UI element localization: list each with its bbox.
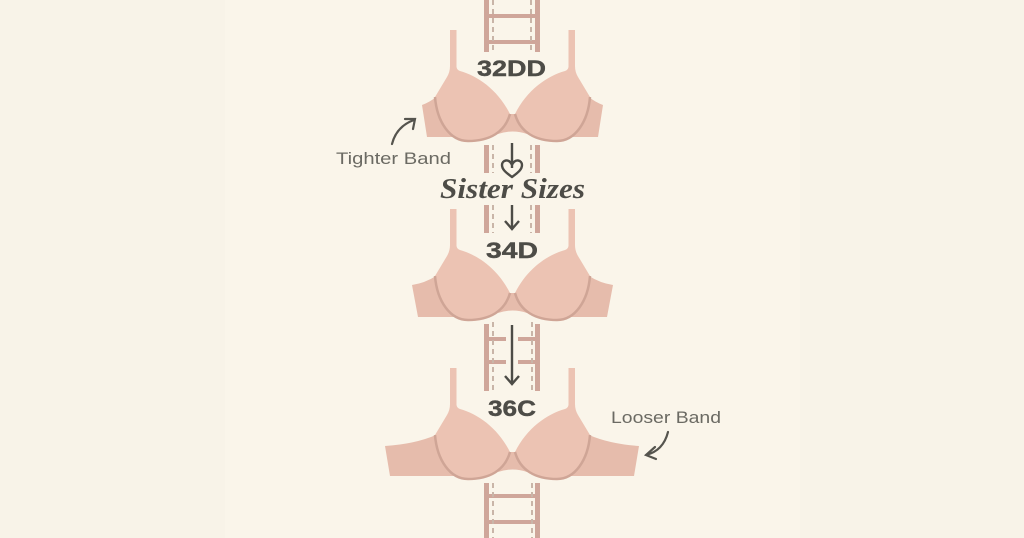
arrow: tighter band pointer bbox=[392, 119, 415, 144]
arrow down to 36C bbox=[505, 325, 519, 384]
label: Looser Band: Looser Band bbox=[611, 409, 721, 427]
arrow: looser band pointer bbox=[646, 432, 668, 459]
size label 32DD: 32DD bbox=[477, 56, 546, 81]
bra 32DD bbox=[422, 30, 603, 142]
ladder strap segment lower middle bbox=[484, 205, 540, 233]
size label 36C: 36C bbox=[488, 396, 536, 421]
heading: Sister Sizes: Sister Sizes bbox=[440, 173, 585, 205]
arrow down to 34D bbox=[505, 205, 519, 229]
size label 34D: 34D bbox=[486, 238, 538, 263]
ladder strap segment upper middle bbox=[484, 145, 540, 173]
ladder strap segment between 34D and 36C bbox=[484, 322, 540, 391]
arrow with heart bbox=[502, 143, 522, 177]
bra 34D bbox=[412, 209, 613, 321]
ladder strap segment bottom bbox=[484, 483, 540, 538]
label: Tighter Band: Tighter Band bbox=[336, 150, 451, 168]
ladder strap segment top bbox=[484, 0, 540, 52]
bra 36C bbox=[385, 368, 639, 480]
